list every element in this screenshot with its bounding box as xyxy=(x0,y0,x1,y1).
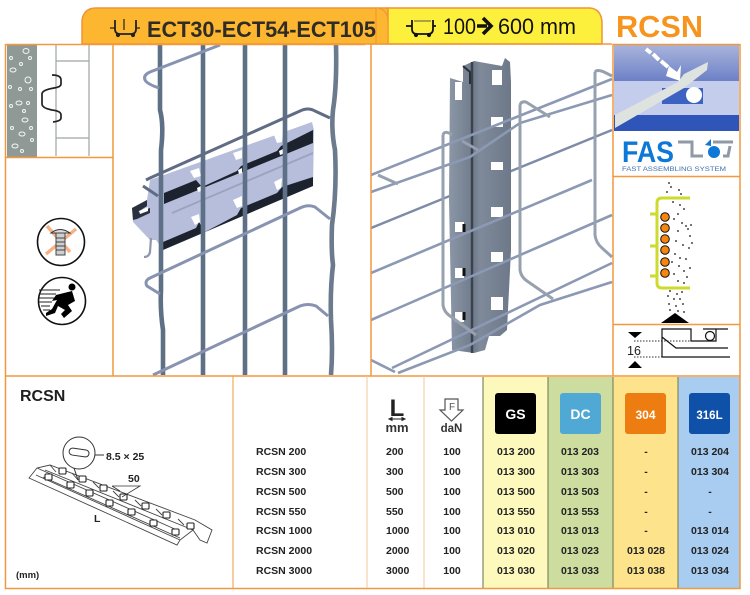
photo: rail against vertical wires xyxy=(132,45,336,375)
row: RCSN 3000: RCSN 3000 xyxy=(256,565,312,577)
rail slots xyxy=(45,468,194,535)
row: RCSN 500: 100 xyxy=(443,486,461,498)
icon: tray width xyxy=(406,20,436,36)
row: RCSN 200: 013 204 xyxy=(691,446,729,458)
icon: tray height xyxy=(110,19,140,36)
row: RCSN 3000: 013 030 xyxy=(497,565,535,577)
column header: length xyxy=(385,395,409,435)
row: RCSN 200: 200 xyxy=(386,446,404,458)
particles xyxy=(666,182,693,313)
row: RCSN 500 xyxy=(256,486,712,498)
pitch: 50 xyxy=(128,473,140,485)
badge: 316L: 316L xyxy=(696,410,723,422)
row: RCSN 3000: 3000 xyxy=(386,565,410,577)
rail profile xyxy=(42,75,61,122)
row: RCSN 500: 500 xyxy=(386,486,404,498)
FAS logo xyxy=(622,136,733,173)
vertical rail xyxy=(449,58,511,353)
row: RCSN 500: 013 500 xyxy=(497,486,535,498)
rail notches xyxy=(190,132,283,225)
row: RCSN 200 xyxy=(256,446,729,458)
row: RCSN 1000: 013 010 xyxy=(497,525,535,537)
hole detail xyxy=(63,437,104,480)
diagram: 16 mm section: 16 xyxy=(627,344,641,358)
badge: DC: DC xyxy=(570,406,591,422)
rail dark bands xyxy=(164,130,313,204)
badge: 304 xyxy=(625,393,666,434)
panel: rail dimension drawing xyxy=(16,388,212,581)
row: RCSN 1000: 013 014 xyxy=(691,525,729,537)
row: RCSN 1000: - xyxy=(644,525,648,537)
concrete texture xyxy=(8,48,34,152)
badge: DC xyxy=(560,393,601,434)
tray wires xyxy=(56,45,89,156)
row: RCSN 1000: 100 xyxy=(443,525,461,537)
badge: GS: GS xyxy=(505,406,526,422)
header tab: width range: 600 mm xyxy=(498,14,576,39)
row: RCSN 300: 013 300 xyxy=(497,466,535,478)
diagram: corrosion section with particles xyxy=(650,182,693,323)
photo: rail mounted vertically in tray xyxy=(371,58,612,373)
rail plate xyxy=(132,122,314,250)
row: RCSN 300: 013 304 xyxy=(691,466,729,478)
horizontal wires xyxy=(143,45,330,375)
row: RCSN 550: 550 xyxy=(386,506,404,518)
row: RCSN 300 xyxy=(256,466,729,478)
row: RCSN 550: - xyxy=(644,506,648,518)
row: RCSN 300: 300 xyxy=(386,466,404,478)
panel: wall mounting section xyxy=(7,45,89,157)
row: RCSN 500: RCSN 500 xyxy=(256,486,306,498)
heading: RCSN xyxy=(20,388,65,405)
column header: length: mm xyxy=(385,420,409,435)
row: RCSN 2000: 013 023 xyxy=(561,545,599,557)
row: RCSN 200: 013 200 xyxy=(497,446,535,458)
row: RCSN 200: 100 xyxy=(443,446,461,458)
column header: load: daN xyxy=(441,423,462,435)
row: RCSN 550: 013 553 xyxy=(561,506,599,518)
row: RCSN 550: 013 550 xyxy=(497,506,535,518)
FAS logo: FAS xyxy=(622,136,674,169)
row: RCSN 2000: 013 028 xyxy=(627,545,665,557)
hole size: 8.5 × 25 xyxy=(106,451,144,463)
row: RCSN 2000: 013 024 xyxy=(691,545,729,557)
row: RCSN 500: 013 503 xyxy=(561,486,599,498)
row: RCSN 300: RCSN 300 xyxy=(256,466,306,478)
row: RCSN 300: - xyxy=(644,466,648,478)
row: RCSN 1000: 013 013 xyxy=(561,525,599,537)
wires behind post xyxy=(371,130,612,228)
U frame wires xyxy=(378,70,612,335)
table rows xyxy=(256,446,729,577)
row: RCSN 1000: 1000 xyxy=(386,525,410,537)
icon panel: FAS wedge diagram xyxy=(614,45,739,131)
row: RCSN 200: RCSN 200 xyxy=(256,446,306,458)
icon: no screws xyxy=(38,218,84,266)
row: RCSN 300: 013 303 xyxy=(561,466,599,478)
column header: load: F xyxy=(449,402,455,413)
row: RCSN 3000: 100 xyxy=(443,565,461,577)
arrow xyxy=(477,18,491,34)
row: RCSN 550 xyxy=(256,506,712,518)
icon: fast installation xyxy=(38,278,86,324)
length label: L xyxy=(94,513,101,525)
badge: GS xyxy=(495,393,536,434)
width text: 100 xyxy=(443,14,476,39)
header tab: compatible series xyxy=(82,8,388,44)
row: RCSN 200: 013 203 xyxy=(561,446,599,458)
row: RCSN 500: - xyxy=(708,486,712,498)
up triangle xyxy=(661,313,689,323)
header tab: width range xyxy=(376,8,602,44)
column header: length: L xyxy=(390,395,404,422)
tray wires xyxy=(371,79,612,373)
table column fills xyxy=(483,377,740,588)
series text: ECT30-ECT54-ECT105 xyxy=(147,17,376,42)
row: RCSN 500: - xyxy=(644,486,648,498)
rail lower hook xyxy=(144,238,151,257)
row: RCSN 2000: 100 xyxy=(443,545,461,557)
row: RCSN 2000: 013 020 xyxy=(497,545,535,557)
row: RCSN 550: - xyxy=(708,506,712,518)
row: RCSN 550: RCSN 550 xyxy=(256,506,306,518)
row: RCSN 3000 xyxy=(256,565,729,577)
badge: 304: 304 xyxy=(635,408,656,422)
row: RCSN 2000: RCSN 2000 xyxy=(256,545,312,557)
row: RCSN 550: 100 xyxy=(443,506,461,518)
rail drawing xyxy=(29,465,212,545)
row: RCSN 2000 xyxy=(256,545,729,557)
product title: RCSN xyxy=(616,9,703,44)
unit: (mm) xyxy=(16,570,39,581)
row: RCSN 1000: RCSN 1000 xyxy=(256,525,312,537)
diagram: 16 mm section xyxy=(627,329,730,368)
row: RCSN 3000: 013 038 xyxy=(627,565,665,577)
FAS caption: FAST ASSEMBLING SYSTEM xyxy=(622,166,726,173)
row: RCSN 300: 100 xyxy=(443,466,461,478)
column header: load xyxy=(440,399,463,435)
row: RCSN 2000: 2000 xyxy=(386,545,410,557)
vertical wires xyxy=(160,45,336,375)
badge: 316L xyxy=(689,393,730,434)
motion arrow xyxy=(646,49,668,67)
row: RCSN 3000: 013 033 xyxy=(561,565,599,577)
row: RCSN 3000: 013 034 xyxy=(691,565,729,577)
row: RCSN 1000 xyxy=(256,525,729,537)
row: RCSN 200: - xyxy=(644,446,648,458)
